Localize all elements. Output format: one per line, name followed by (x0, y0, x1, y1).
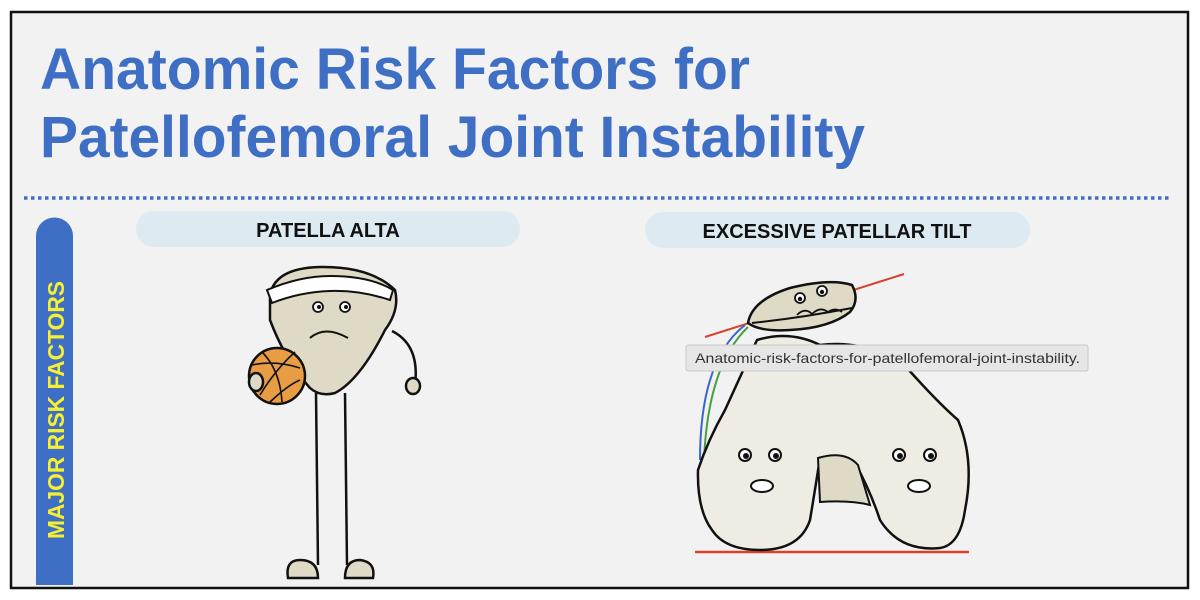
title (40, 37, 865, 170)
tooltip: Anatomic-risk-factors-for-patellofemoral-joint-instability. (695, 350, 1080, 366)
pill: excessive patellar tilt (645, 212, 1030, 248)
pill: patella alta: PATELLA ALTA (256, 220, 400, 242)
title: Patellofemoral Joint Instability (40, 105, 865, 170)
title: Anatomic Risk Factors for (40, 37, 750, 102)
illustration: patellar tilt on femur (695, 274, 969, 552)
illustration: patella alta character (249, 267, 420, 578)
side bar: major risk factors (36, 218, 73, 585)
pill: excessive patellar tilt: EXCESSIVE PATELLAR TILT (703, 221, 971, 243)
tooltip (686, 345, 1088, 371)
side bar: major risk factors: MAJOR RISK FACTORS (43, 281, 69, 539)
pill: patella alta (136, 211, 520, 247)
